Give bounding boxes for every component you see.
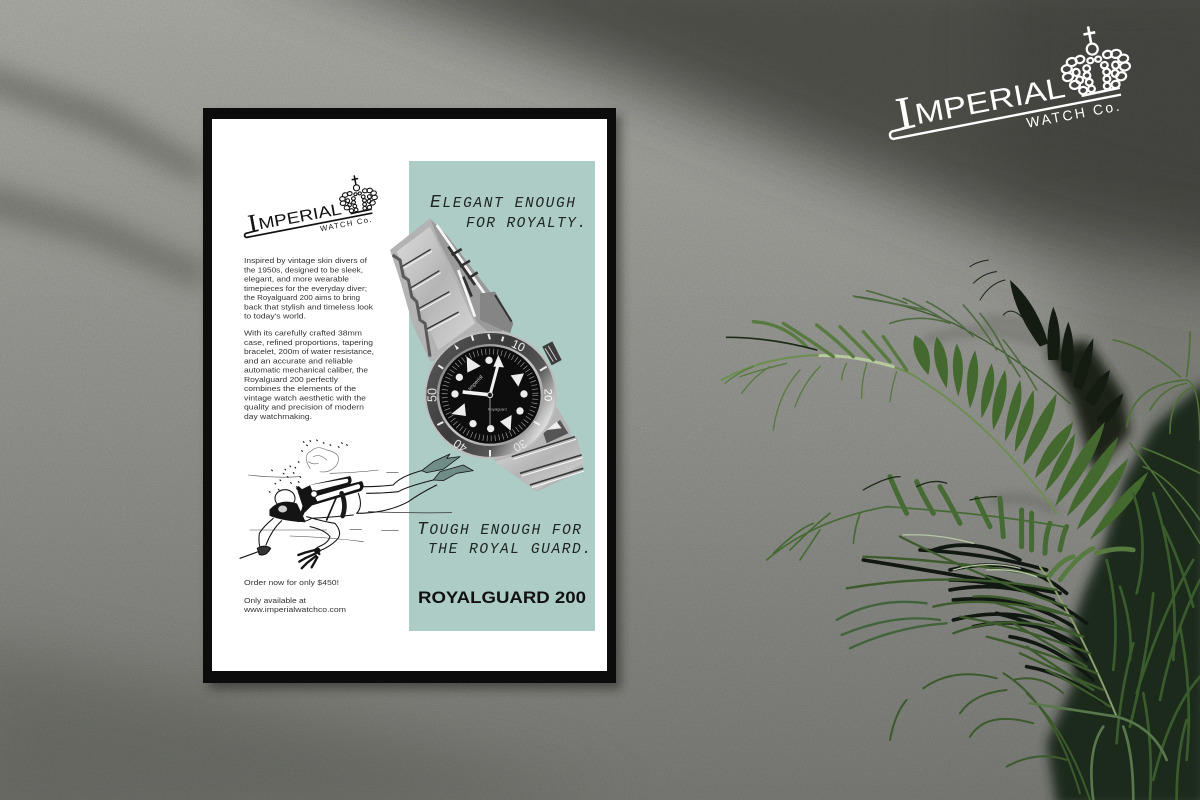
poster frame [203,108,616,683]
frond 1 broad leaflets [913,335,1148,540]
headline: tough enough for the royal guard: TOUGH ENOUGH FOR [417,520,581,540]
poster: framed advertisement [203,108,616,683]
illustration: scuba diver [240,440,473,568]
text block: product story: combines the elements of the [244,384,356,393]
plant shadow on wall [927,320,1097,510]
text block: product story: Inspired by vintage skin divers of [244,256,368,265]
text block: product story: day watchmaking. [244,412,312,421]
text block: product story: back that stylish and timeless look [244,302,373,311]
upper dark frond [853,260,1123,425]
headline: elegant enough for royalty [430,193,586,232]
text block: product story: to today's world. [244,312,306,320]
text block: call to action: Only available at [244,596,306,605]
bezel: 40 [451,436,470,455]
logo: Imperial Watch Co. (poster, black): MPERIAL [257,200,343,233]
bezel: 10 [509,336,528,355]
logo: Imperial Watch Co. (poster, black): WATCH Co. [319,215,372,233]
dial [439,346,541,444]
text block: product story: vintage watch aesthetic with the [244,393,366,402]
text block: product story: the Royalguard 200 aims to bring [244,293,360,302]
logo: Imperial Watch Co. (poster, black): I [246,208,259,238]
poster paper [212,119,607,671]
bezel [424,331,557,459]
watch illustration [390,218,584,492]
poster shadow [209,115,621,689]
logo: Imperial Watch Co. (poster, black) [237,172,382,247]
text block: product story: Royalguard 200 perfectly [244,375,338,384]
headline: elegant enough for royalty: FOR ROYALTY. [466,216,586,232]
frond 1 rachis and thin tip leaflets [722,322,1057,513]
head and mask [275,490,295,507]
text block: product story: the 1950s, designed to be sleek, [244,265,363,274]
logo: Imperial Watch Co. (wall, white): I [892,86,917,139]
text block: product story: timepieces for the everyday diver; [244,284,367,293]
text block: call to action: Order now for only $450! [244,578,339,587]
body [298,471,437,551]
headline: tough enough for the royal guard: THE ROYAL GUARD. [428,542,591,558]
text block: product story: case, refined proportions, tapering [244,338,373,347]
winding crown [542,341,562,365]
air tanks [298,477,363,512]
plant: palm fronds [722,260,1200,800]
knife and hand [240,552,258,558]
text block: product story: elegant, and more wearable [244,274,349,284]
headline: tough enough for the royal guard [417,520,591,558]
bracelet upper [390,218,513,362]
logo: Imperial Watch Co. (wall, white) [877,20,1138,156]
upper thin leaflets [855,291,1037,390]
product name: ROYALGUARD 200 [418,588,586,607]
frond 3: lower-left frond [767,477,1067,560]
text block: product story: bracelet, 200m of water resistance, [244,347,374,356]
fins [422,454,460,473]
text block: call to action: www.imperialwatchco.com [243,605,346,614]
dark foliage mass [1047,380,1200,800]
headline: elegant enough for royalty: ELEGANT ENOUGH [430,193,575,213]
bracelet lower [493,407,584,492]
bezel: 20 [541,389,553,401]
text block: product story: With its carefully crafted 38mm [244,328,362,338]
frond 4: large lower frond leaflets [837,535,1117,717]
bottom fronds [890,673,1167,800]
bezel: 50 [426,388,440,402]
text block: product story [244,256,374,421]
logo: Imperial Watch Co. (wall, white): MPERIAL [912,72,1068,131]
teal panel [409,161,595,631]
logo: Imperial Watch Co. (wall, white): WATCH Co. [1025,98,1120,131]
text block: call to action [243,578,346,614]
right side leaves [1047,332,1200,800]
text block: product story: quality and precision of modern [244,402,364,412]
text block: product story: automatic mechanical caliber, the [244,366,368,374]
text block: product story: and an accurate and reliable [244,356,353,365]
dial: Royalguard [488,408,507,412]
dial: Imperial [467,374,484,392]
bezel: 30 [510,436,529,455]
open hand [298,549,319,568]
